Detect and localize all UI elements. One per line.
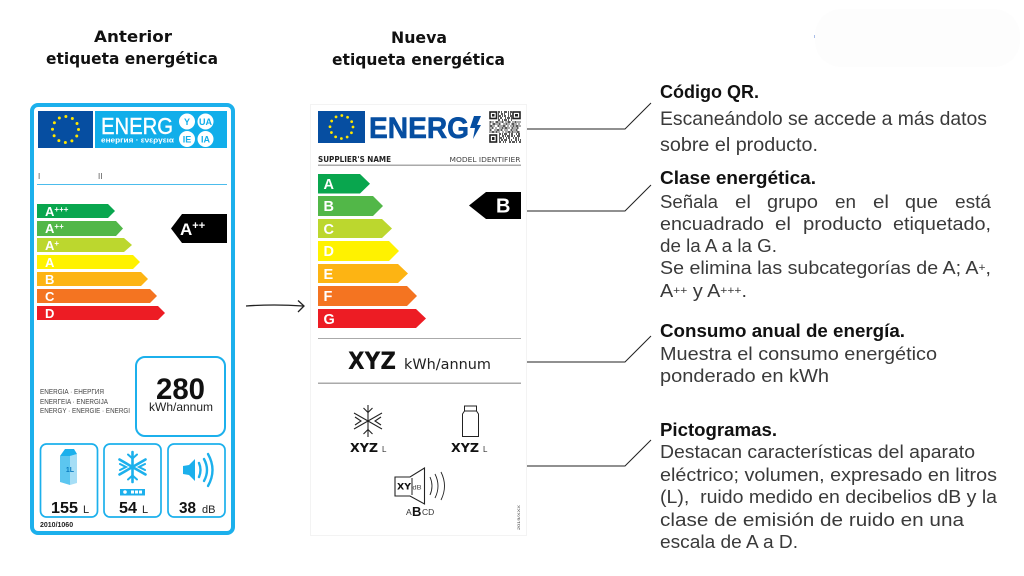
icon: noise speaker: CD <box>422 507 434 517</box>
text: XYZ kWh/annum: kWh/annum <box>404 357 491 373</box>
text block: Código QR: Escaneándolo se accede a más datos <box>660 108 987 130</box>
heading: nueva etiqueta: Nueva <box>391 28 447 47</box>
icon: fridge carton: L <box>483 445 488 454</box>
ENERG banner old: ENERG <box>101 113 173 139</box>
ENERG banner old: енергия · ενεργεια <box>101 138 175 144</box>
box: 280 kWh/annum: kWh/annum <box>149 400 213 414</box>
panel: old energy label <box>32 105 233 533</box>
icon: noise speaker: A <box>406 507 412 517</box>
text: energy languages: ENERGIA · ЕНЕРГИЯ <box>40 387 104 396</box>
box: freezer volume: L <box>142 504 148 516</box>
text block: Consumo anual <box>660 321 937 386</box>
text block: Clase energética: etiquetado, <box>893 214 991 234</box>
text: XYZ kWh/annum: XYZ <box>348 347 396 375</box>
energy scale new: B <box>324 199 334 215</box>
text block: Clase energética: el <box>775 214 791 234</box>
arrow: class B <box>469 192 521 219</box>
text block: Código QR: Código QR. <box>660 82 759 102</box>
icon: speaker blue <box>183 454 212 486</box>
arrow: class A++: ++ <box>192 220 205 232</box>
icon: noise speaker: dB <box>412 484 422 492</box>
heading: anterior etiqueta <box>46 27 218 68</box>
heading: anterior etiqueta: etiqueta energética <box>46 49 218 68</box>
text block: Clase energética: Se elimina las subcategorías de A; A <box>660 258 952 278</box>
text block: Clase energética: encuadrado <box>660 214 764 234</box>
energy scale old: D <box>45 306 54 321</box>
text block: Clase energética: +++ <box>720 285 741 297</box>
text block: Clase energética: . <box>741 281 747 301</box>
ENERG banner old: Y <box>184 117 190 127</box>
text block: Clase energética <box>660 168 992 301</box>
text block: Pictogramas: clase de emisión de ruido en una <box>660 510 965 530</box>
text block: Pictogramas: eléctrico; volumen, expresado en litros <box>660 465 997 485</box>
box: fridge volume: 155 <box>51 500 78 517</box>
supplier placeholders old <box>37 172 227 185</box>
text block: Clase energética: en <box>835 192 856 212</box>
text block: Código QR <box>660 82 987 156</box>
text block: Clase energética: que <box>905 192 938 212</box>
energy scale old: A <box>45 221 54 236</box>
energy scale new <box>318 174 426 328</box>
energy scale old: A <box>45 204 54 219</box>
energy scale old: +++ <box>54 205 69 214</box>
faint background blob <box>814 9 1020 67</box>
icon: fridge carton: XYZ <box>451 440 479 455</box>
icon: EU flag old <box>38 111 93 148</box>
supplier and model: SUPPLIER'S NAME <box>318 155 391 164</box>
ENERG logo new: ENERG <box>369 112 469 145</box>
text: regulation old: 2010/1060 <box>40 522 73 529</box>
ENERG banner old: UA <box>199 117 212 127</box>
arrow: class A++ <box>171 214 227 243</box>
text: energy languages: ΕΝΕRΓΕΙΑ · ENERGIJA <box>40 397 108 406</box>
box: noise: 38 <box>179 500 196 517</box>
supplier and model: MODEL IDENTIFIER <box>450 156 521 164</box>
text: XYZ kWh/annum <box>348 347 491 375</box>
icon: noise speaker: B <box>412 504 421 519</box>
arrow: class B: B <box>496 196 510 218</box>
text block: Clase energética: el <box>873 192 889 212</box>
text block: Pictogramas: (L), ruido medido en decibelios dB y la <box>660 487 998 507</box>
supplier and model <box>318 155 521 166</box>
icon: snowflake blue <box>120 452 146 482</box>
box: freezer volume: 54 <box>119 500 137 517</box>
box: fridge volume: L <box>83 504 89 516</box>
icon: noise speaker: XY <box>397 482 412 492</box>
text block: Clase energética: ++ <box>673 285 687 297</box>
heading: nueva etiqueta <box>332 28 505 69</box>
icon: star rating <box>120 489 145 496</box>
supplier placeholders old: I <box>38 172 40 181</box>
energy scale old: + <box>54 239 59 248</box>
text block: Pictogramas <box>660 420 998 552</box>
text block: Consumo anual: ponderado en kWh <box>660 366 829 386</box>
icon: freezer snowflake: XYZ <box>350 440 378 455</box>
box: freezer volume <box>104 444 161 517</box>
box: 280 kWh/annum: 280 <box>156 373 205 406</box>
text block: Clase energética: está <box>955 192 992 212</box>
energy scale new: C <box>324 222 334 238</box>
energy scale old: A <box>45 238 54 253</box>
icon: milk carton: 1L <box>66 467 75 474</box>
text block: Clase energética: el <box>735 192 751 212</box>
energy scale new: A <box>324 177 334 193</box>
text: energy languages: ENERGY · ENERGIE · ENERGI <box>40 406 130 415</box>
text block: Pictogramas: Destacan características del aparato <box>660 442 975 462</box>
panel: new energy label <box>310 104 526 536</box>
text block: Clase energética: , <box>986 258 991 278</box>
ENERG banner old: IE <box>183 134 191 144</box>
connector: QR <box>527 103 651 129</box>
text block: Pictogramas: Pictogramas. <box>660 420 777 440</box>
connector: pictograms <box>527 440 651 466</box>
supplier placeholders old: II <box>98 172 102 181</box>
text block: Clase energética: producto <box>803 214 882 234</box>
text block: Consumo anual: Consumo anual de energía. <box>660 321 905 341</box>
energy scale old: B <box>45 272 54 287</box>
arrow: old to new <box>246 300 304 312</box>
energy scale old: A <box>45 255 55 270</box>
arrow: class A++: A <box>180 220 192 239</box>
connector: class <box>527 185 651 211</box>
energy scale new: D <box>324 244 334 260</box>
text: energy languages <box>40 387 130 415</box>
box: 280 kWh/annum <box>136 357 225 436</box>
text block: Clase energética: Señala <box>660 192 719 212</box>
icon: EU flag new <box>318 111 365 143</box>
text block: Código QR: sobre el producto. <box>660 134 818 156</box>
ENERG banner old <box>95 111 227 148</box>
text block: Consumo anual: Muestra el consumo energético <box>660 344 937 364</box>
icon: noise speaker <box>395 468 444 519</box>
energy scale old: ++ <box>54 222 64 231</box>
energy scale old: C <box>45 289 55 304</box>
text block: Pictogramas: escala de A a D. <box>660 532 798 552</box>
energy scale new: G <box>324 312 335 328</box>
heading: nueva etiqueta: etiqueta energética <box>332 50 505 69</box>
text block: Clase energética: y A <box>687 281 720 301</box>
text: regulation new: 2019/XXX <box>516 505 521 530</box>
box: noise <box>168 444 225 517</box>
ENERG banner old: IA <box>201 134 211 144</box>
box: fridge volume <box>40 444 98 517</box>
text block: Clase energética: Clase energética. <box>660 168 816 188</box>
energy scale new: E <box>324 267 334 283</box>
heading: anterior etiqueta: Anterior <box>94 27 172 46</box>
text block: Clase energética: grupo <box>767 192 818 212</box>
text block: Clase energética: de la A a la G. <box>660 236 777 256</box>
energy scale new: F <box>324 289 332 305</box>
icon: freezer snowflake: L <box>382 445 387 454</box>
icon: QR code <box>490 112 521 142</box>
text block: Clase energética: + <box>979 262 986 274</box>
connector: consumption <box>527 336 651 362</box>
box: noise: dB <box>202 504 215 516</box>
text block: Clase energética: A <box>660 281 672 301</box>
energy scale old <box>37 204 165 321</box>
icon: freezer snowflake <box>350 405 387 455</box>
icon: fridge carton <box>451 406 488 455</box>
